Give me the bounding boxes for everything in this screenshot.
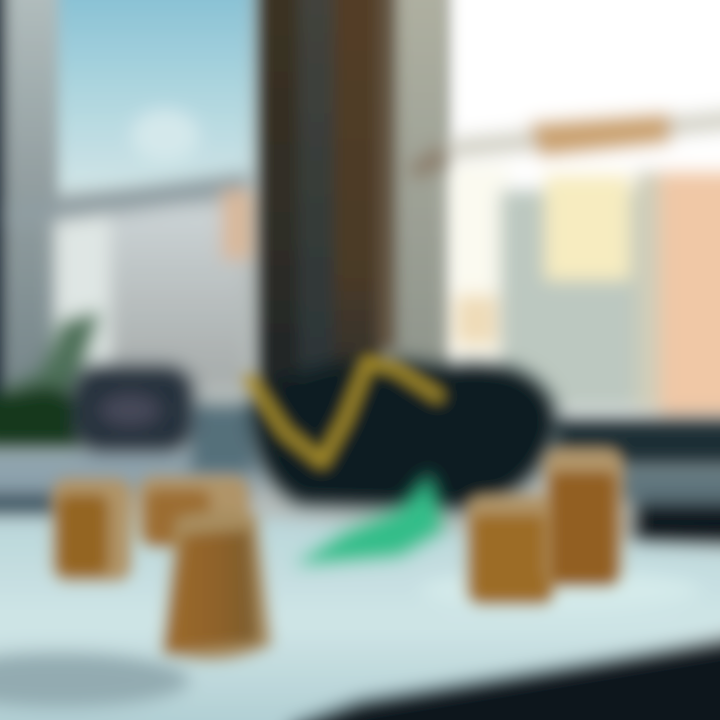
plant — [0, 312, 100, 450]
coin stack, front — [162, 511, 272, 661]
dark sofa, centre — [250, 360, 558, 510]
chart: yellow line — [250, 362, 438, 462]
light column right of pillar — [392, 0, 450, 370]
coin stack, right short — [466, 495, 556, 605]
coin stack, back left — [52, 478, 132, 582]
dark table edge, lower right — [290, 638, 720, 720]
left window frame — [0, 0, 58, 410]
coin stack, back centre — [138, 476, 250, 548]
sky with cloud — [50, 0, 255, 195]
wooden pillar — [258, 0, 396, 400]
dark chair, left — [72, 366, 194, 452]
city buildings, right — [450, 165, 720, 417]
chart: green area — [295, 472, 444, 565]
table surface — [0, 518, 720, 720]
window crossbar and city, left — [10, 172, 252, 385]
dark band behind table — [0, 405, 720, 544]
window rail, right — [410, 108, 720, 180]
coin stack, right tall — [545, 448, 623, 586]
